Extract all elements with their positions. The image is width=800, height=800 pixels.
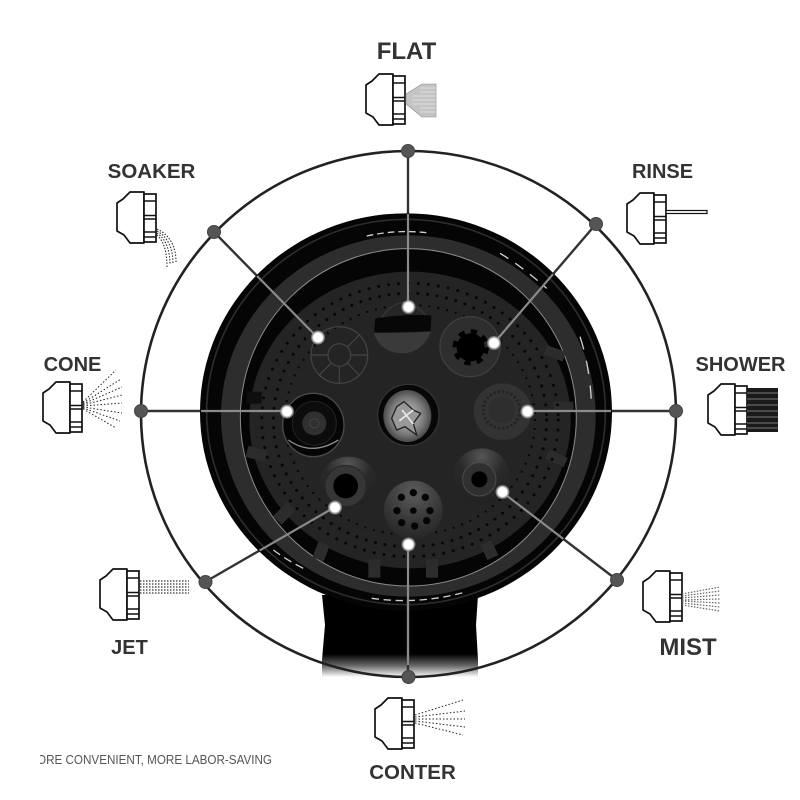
label and icon: rinse — [627, 161, 707, 244]
mist outlet — [453, 448, 510, 505]
centre screw — [378, 384, 439, 446]
outlet markers (white dots) — [281, 301, 534, 550]
label and icon: cone — [43, 354, 122, 433]
lower connector over handle — [407, 600, 409, 665]
label and icon: soaker — [108, 160, 196, 267]
plate perforation dots — [262, 283, 558, 557]
label and icon: cone: CONE — [44, 354, 101, 376]
label and icon: flat: FLAT — [377, 38, 437, 65]
light connector segments over nozzle — [201, 214, 611, 610]
outer ring — [141, 151, 676, 677]
cone outlet — [283, 393, 344, 457]
connector lines — [141, 151, 676, 677]
label and icon: rinse: RINSE — [632, 161, 693, 183]
nozzle head — [200, 213, 612, 611]
label and icon: mist: MIST — [659, 634, 717, 661]
flat outlet — [374, 302, 431, 353]
label and icon: flat — [366, 38, 437, 125]
label and icon: mist — [643, 571, 720, 661]
label and icon: jet: JET — [111, 637, 148, 659]
label and icon: soaker: SOAKER — [108, 160, 196, 183]
label and icon: shower: SHOWER — [696, 354, 786, 376]
rinse outlet — [440, 317, 500, 377]
label and icon: jet — [100, 569, 189, 659]
soaker outlet — [311, 327, 368, 383]
plate ribs — [246, 345, 573, 578]
label and icon: shower — [696, 354, 786, 435]
conter outlet — [384, 481, 443, 539]
ring nodes — [134, 144, 682, 684]
label and icon: conter — [369, 698, 465, 784]
shower outlet — [473, 383, 532, 440]
jet outlet — [320, 457, 377, 507]
rim highlights — [273, 232, 592, 601]
tagline: ORE CONVENIENT, MORE LABOR-SAVING — [37, 753, 272, 767]
inner plate — [249, 272, 571, 568]
label and icon: conter: CONTER — [369, 761, 456, 784]
nozzle handle — [322, 595, 478, 677]
